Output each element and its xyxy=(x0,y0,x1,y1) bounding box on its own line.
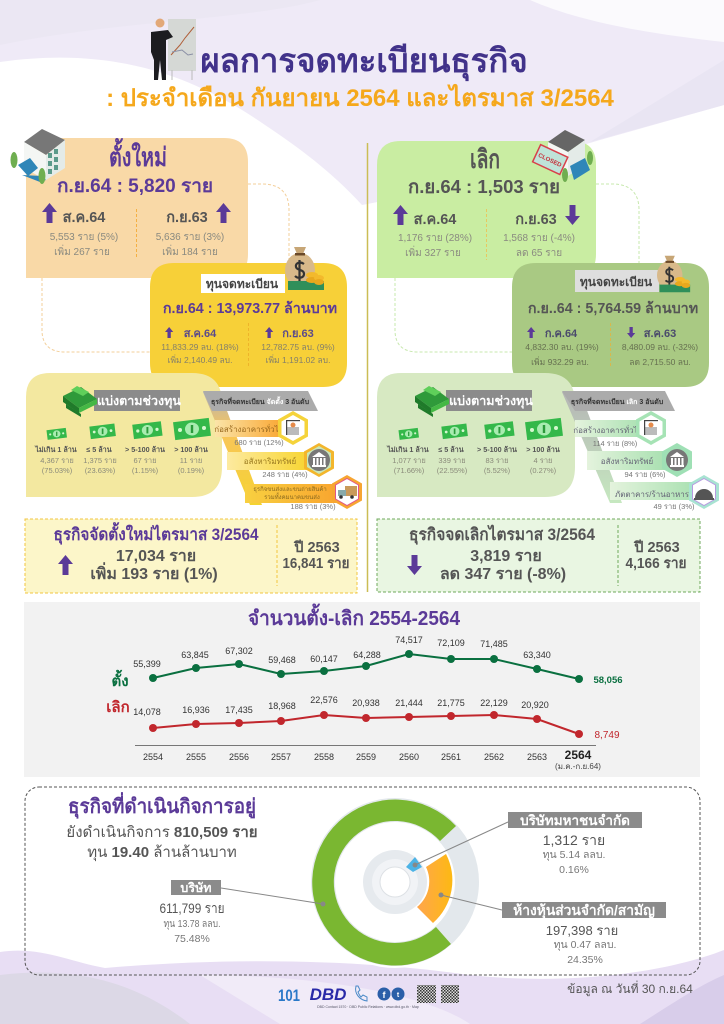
arrow up xyxy=(393,205,408,225)
band 5-100M: (5.52%) xyxy=(484,466,511,475)
previous year xyxy=(156,210,224,258)
sector 1 xyxy=(214,411,308,447)
summary text: ทุน 19.40 ล้านล้านบาท xyxy=(87,844,237,862)
icon: construction hexagon xyxy=(636,411,666,445)
band over 100M: > 100 ล้าน xyxy=(526,445,560,454)
band label: แบ่งตามช่วงทุน xyxy=(97,394,181,409)
band over 100M: > 100 ล้าน xyxy=(174,445,208,454)
callout: public company: 1,312 ราย xyxy=(543,832,605,848)
capital vs last year: 12,782.75 ลบ. (9%) xyxy=(261,342,335,352)
band 5-100M xyxy=(125,421,165,475)
previous month xyxy=(398,212,472,259)
arrow up xyxy=(216,203,231,223)
data labels: closed: 14,078 xyxy=(133,707,161,717)
band under 1M: 4,367 ราย xyxy=(40,456,74,465)
connector: closed business to capital xyxy=(395,184,639,352)
capital vs last year xyxy=(622,328,698,367)
line: new xyxy=(149,650,583,683)
previous year: 16,841 ราย xyxy=(282,556,350,572)
data labels: new: 58,056 xyxy=(593,675,623,686)
sector 1: ก่อสร้างอาคารทั่วไป xyxy=(573,424,643,435)
summary text xyxy=(66,824,258,862)
band 5-100M: > 5-100 ล้าน xyxy=(477,445,517,454)
icon: truck hexagon xyxy=(332,475,362,509)
Q3 figures: 17,034 ราย xyxy=(116,548,196,565)
sector 1: ก่อสร้างอาคารทั่วไป xyxy=(214,423,284,434)
footer logos and contact: 101 xyxy=(278,986,300,1005)
x-axis years: 2558 xyxy=(314,752,334,762)
previous year xyxy=(626,539,686,572)
band over 100M: (0.27%) xyxy=(530,466,557,475)
sector 3: ธุรกิจขนส่งและขนถ่ายสินค้า xyxy=(253,486,327,493)
Q3 figures xyxy=(440,548,566,583)
connector: new business to capital xyxy=(42,184,289,352)
data labels: new: 67,302 xyxy=(225,646,253,656)
band over 100M: 4 ราย xyxy=(534,456,552,465)
x-axis years: 2564 xyxy=(565,748,592,762)
data labels: new xyxy=(133,635,623,686)
panel: top 3 new sectors xyxy=(203,391,362,511)
callout: company: ทุน 13.78 ลลบ. xyxy=(164,918,220,930)
sector 2 xyxy=(587,443,692,479)
previous year: 5,636 ราย (3%) xyxy=(156,232,224,243)
arrow up xyxy=(527,327,535,338)
x-axis years: 2554 xyxy=(143,752,163,762)
panel: new registrations xyxy=(26,137,248,278)
band under 1M xyxy=(386,428,429,475)
band over 100M: 11 ราย xyxy=(180,456,202,465)
icon: money stack xyxy=(415,386,449,417)
sector 3: 49 ราย (3%) xyxy=(654,502,695,511)
data labels: new: 63,340 xyxy=(523,650,551,660)
capital vs last month: ก.ค.64 xyxy=(545,328,578,340)
previous month xyxy=(50,210,118,258)
band up to 5M: (22.55%) xyxy=(437,466,468,475)
panel: line chart 2554-2564 xyxy=(24,602,700,777)
data labels: closed: 22,576 xyxy=(310,695,338,705)
arrow up xyxy=(42,203,57,223)
banner: ธุรกิจที่จดทะเบียน เลิก 3 อันดับ xyxy=(571,396,664,406)
Q3 figures: เพิ่ม 193 ราย (1%) xyxy=(90,562,218,583)
sector 2: อสังหาริมทรัพย์ xyxy=(601,456,653,466)
data labels: closed: 8,749 xyxy=(594,730,620,741)
previous month: ส.ค.64 xyxy=(63,210,105,226)
band 5-100M xyxy=(477,421,517,475)
band under 1M xyxy=(34,428,77,475)
band label xyxy=(446,390,533,411)
footer logos and contact: t xyxy=(397,992,400,999)
subtitle: : ประจำเดือน กันยายน 2564 และไตรมาส 3/2564 xyxy=(106,83,615,112)
arrow down xyxy=(407,555,422,575)
capital label: ทุนจดทะเบียน xyxy=(206,277,279,292)
heading: ธุรกิจที่ดำเนินกิจการอยู่ xyxy=(68,791,256,820)
x-axis years: 2562 xyxy=(484,752,504,762)
band up to 5M: 1,375 ราย xyxy=(83,456,117,465)
arrow up xyxy=(265,327,273,338)
data labels: closed: 16,936 xyxy=(182,705,210,715)
panel: capital bands (new) xyxy=(26,373,222,497)
panel: registered capital (closed) xyxy=(512,263,709,387)
band under 1M: ไม่เกิน 1 ล้าน xyxy=(386,445,429,454)
capital vs last year: เพิ่ม 1,191.02 ลบ. xyxy=(266,354,330,365)
capital total: ก.ย..64 : 5,764.59 ล้านบาท xyxy=(528,300,698,317)
x-axis years: 2555 xyxy=(186,752,206,762)
capital vs last month: เพิ่ม 2,140.49 ลบ. xyxy=(168,354,232,365)
icon: cloche hexagon xyxy=(689,475,719,509)
x-axis years: 2563 xyxy=(527,752,547,762)
capital label xyxy=(575,270,659,292)
band 5-100M: 67 ราย xyxy=(133,456,157,465)
banner xyxy=(203,391,318,411)
band under 1M: ไม่เกิน 1 ล้าน xyxy=(34,445,77,454)
icon: money stack xyxy=(63,386,97,417)
icon: money bag xyxy=(285,247,324,290)
icon: closed building xyxy=(533,130,593,182)
band up to 5M: 339 ราย xyxy=(438,456,466,465)
closed total: ก.ย.64 : 1,503 ราย xyxy=(408,176,560,197)
x-axis years: 2556 xyxy=(229,752,249,762)
x-axis years: 2557 xyxy=(271,752,291,762)
Q3 heading: ธุรกิจจัดตั้งใหม่ไตรมาส 3/2564 xyxy=(54,522,259,545)
icon: bank hexagon xyxy=(662,443,692,477)
band up to 5M xyxy=(437,424,468,475)
band under 1M: 1,077 ราย xyxy=(392,456,426,465)
data labels: closed: 21,775 xyxy=(437,698,465,708)
callout: public company: 0.16% xyxy=(559,864,589,876)
x-axis years: 2561 xyxy=(441,752,461,762)
previous month: เพิ่ม 327 ราย xyxy=(405,245,461,259)
donut chart xyxy=(309,796,481,968)
sector 1: 680 ราย (12%) xyxy=(234,438,284,447)
Q3 heading: ธุรกิจจดเลิกไตรมาส 3/2564 xyxy=(409,524,596,545)
data labels: closed: 20,938 xyxy=(352,698,380,708)
panel: operating businesses xyxy=(25,787,700,975)
panel: Q3 new xyxy=(25,519,357,593)
callout: company: 75.48% xyxy=(174,933,210,945)
data labels: closed: 22,129 xyxy=(480,698,508,708)
band under 1M: (75.03%) xyxy=(42,466,73,475)
data labels: closed: 18,968 xyxy=(268,701,296,711)
icon: money bag xyxy=(657,256,690,292)
arrow up xyxy=(165,327,173,338)
capital vs last year: ลด 2,715.50 ลบ. xyxy=(629,357,691,367)
band label: แบ่งตามช่วงทุน xyxy=(449,394,533,409)
new total: ก.ย.64 : 5,820 ราย xyxy=(57,176,213,197)
Q3 figures: ลด 347 ราย (-8%) xyxy=(440,566,566,583)
series label: closed: เลิก xyxy=(106,698,130,716)
previous year: ลด 65 ราย xyxy=(516,248,562,259)
band over 100M xyxy=(525,418,563,475)
data labels: new: 55,399 xyxy=(133,659,161,669)
capital vs last month: ส.ค.64 xyxy=(184,328,217,340)
footer logos and contact: f xyxy=(382,990,386,1000)
icon: closed building: CLOSED xyxy=(537,153,563,169)
title illustration: presenter with chart xyxy=(151,18,196,80)
capital total: ก.ย.64 : 13,973.77 ล้านบาท xyxy=(163,300,337,317)
band 5-100M: (1.15%) xyxy=(132,466,159,475)
capital vs last month: เพิ่ม 932.29 ลบ. xyxy=(531,356,589,367)
previous month: ส.ค.64 xyxy=(414,212,456,228)
Q3 figures: 3,819 ราย xyxy=(470,548,542,565)
chart title: จำนวนตั้ง-เลิก 2554-2564 xyxy=(248,603,461,630)
data labels: closed xyxy=(133,695,620,741)
sector 3: 188 ราย (3%) xyxy=(290,502,336,511)
capital vs last year: 8,480.09 ลบ. (-32%) xyxy=(622,342,698,352)
data labels: closed: 21,444 xyxy=(395,698,423,708)
band up to 5M xyxy=(83,424,117,475)
title: ผลการจดทะเบียนธุรกิจ xyxy=(200,42,528,82)
callout: partnership xyxy=(438,892,666,966)
icon: bank hexagon xyxy=(304,443,334,477)
capital vs last month: 11,833.29 ลบ. (18%) xyxy=(161,342,239,352)
x-axis years xyxy=(143,748,601,771)
footer logos and contact: DBD xyxy=(310,985,346,1004)
previous year: เพิ่ม 184 ราย xyxy=(162,244,218,258)
icon: office building xyxy=(10,129,65,184)
capital vs last year xyxy=(261,328,335,365)
band up to 5M: ≤ 5 ล้าน xyxy=(438,445,464,454)
band up to 5M: (23.63%) xyxy=(85,466,116,475)
footer logos and contact: DBD Contact 1570 · DBD Public Relations · www.dbd.go.th · Map xyxy=(317,1005,419,1009)
previous year: ก.ย.63 xyxy=(166,210,208,226)
x-axis years: (ม.ค.-ก.ย.64) xyxy=(555,762,601,771)
line: closed xyxy=(149,711,583,738)
panel: closed businesses xyxy=(377,141,596,278)
callout: partnership: 197,398 ราย xyxy=(546,923,618,938)
arrow up xyxy=(58,555,73,575)
sector 2: 94 ราย (6%) xyxy=(625,470,666,479)
sector 2: อสังหาริมทรัพย์ xyxy=(244,456,296,466)
capital vs last month xyxy=(525,328,599,367)
data labels: new: 74,517 xyxy=(395,635,423,645)
capital vs last month: 4,832.30 ลบ. (19%) xyxy=(525,342,599,352)
previous year: ปี 2563 xyxy=(633,539,680,556)
x-axis years: 2560 xyxy=(399,752,419,762)
data labels: new: 63,845 xyxy=(181,650,209,660)
previous year: 4,166 ราย xyxy=(626,556,686,572)
Q3 figures xyxy=(90,548,218,583)
callout: partnership: ทุน 0.47 ลลบ. xyxy=(554,939,616,951)
arrow down xyxy=(565,205,580,225)
sector 3: รวมทั้งคมนาคมขนส่ง xyxy=(264,491,320,501)
capital vs last year: ส.ค.63 xyxy=(644,328,676,340)
previous year: ก.ย.63 xyxy=(515,212,557,228)
center divider line xyxy=(366,143,368,592)
sector 1: 114 ราย (8%) xyxy=(593,439,638,448)
capital label: ทุนจดทะเบียน xyxy=(580,275,653,290)
series label: new: ตั้ง xyxy=(111,669,129,690)
heading: new: ตั้งใหม่ xyxy=(109,137,167,172)
panel: Q3 closed xyxy=(377,519,700,592)
callout: public company: ทุน 5.14 ลลบ. xyxy=(543,849,605,861)
capital vs last year: ก.ย.63 xyxy=(282,328,314,340)
sector 2: 248 ราย (4%) xyxy=(262,470,308,479)
band over 100M xyxy=(173,418,211,475)
sector 2 xyxy=(227,443,334,479)
previous month: เพิ่ม 267 ราย xyxy=(54,244,110,258)
callout: partnership: 24.35% xyxy=(567,954,603,966)
previous month: 1,176 ราย (28%) xyxy=(398,233,472,244)
panel: top 3 closed sectors xyxy=(562,391,719,511)
data labels: new: 64,288 xyxy=(353,650,381,660)
previous year: 1,568 ราย (-4%) xyxy=(503,233,575,244)
data labels: new: 72,109 xyxy=(437,638,465,648)
banner: ธุรกิจที่จดทะเบียน จัดตั้ง 3 อันดับ xyxy=(211,395,310,406)
summary text: ยังดำเนินกิจการ 810,509 ราย xyxy=(66,824,258,841)
panel: capital bands (closed) xyxy=(377,373,575,497)
data labels: new: 59,468 xyxy=(268,655,296,665)
band label xyxy=(94,390,181,411)
previous year: ปี 2563 xyxy=(293,539,340,556)
capital label xyxy=(201,274,285,293)
band up to 5M: ≤ 5 ล้าน xyxy=(86,445,112,454)
previous month: 5,553 ราย (5%) xyxy=(50,232,118,243)
band over 100M: (0.19%) xyxy=(178,466,205,475)
sector 3: ภัตตาคาร/ร้านอาหาร xyxy=(615,490,690,499)
footer logos and contact xyxy=(278,985,459,1009)
x-axis years: 2559 xyxy=(356,752,376,762)
icon: construction hexagon xyxy=(278,411,308,445)
data labels: new: 60,147 xyxy=(310,654,338,664)
sector 1 xyxy=(573,411,666,448)
callout: company xyxy=(160,880,326,945)
callout: public company: บริษัทมหาชนจำกัด xyxy=(520,813,630,828)
callout: public company xyxy=(412,812,642,876)
data labels: closed: 17,435 xyxy=(225,705,253,715)
previous year xyxy=(503,212,575,259)
callout: company: 611,799 ราย xyxy=(160,900,224,916)
capital vs last month xyxy=(161,328,239,365)
banner xyxy=(562,391,675,411)
sector 3 xyxy=(245,475,362,511)
arrow down xyxy=(627,327,635,338)
callout: company: บริษัท xyxy=(180,881,212,895)
sector 3 xyxy=(610,475,719,511)
data date note: ข้อมูล ณ วันที่ 30 ก.ย.64 xyxy=(567,980,693,997)
band under 1M: (71.66%) xyxy=(394,466,425,475)
panel: registered capital (new) xyxy=(150,263,347,387)
data labels: closed: 20,920 xyxy=(521,700,549,710)
data labels: new: 71,485 xyxy=(480,639,508,649)
heading: closed: เลิก xyxy=(470,144,500,174)
previous year xyxy=(282,539,350,572)
callout: partnership: ห้างหุ้นส่วนจำกัด/สามัญ xyxy=(513,903,655,919)
band 5-100M: > 5-100 ล้าน xyxy=(125,445,165,454)
band 5-100M: 83 ราย xyxy=(485,456,509,465)
